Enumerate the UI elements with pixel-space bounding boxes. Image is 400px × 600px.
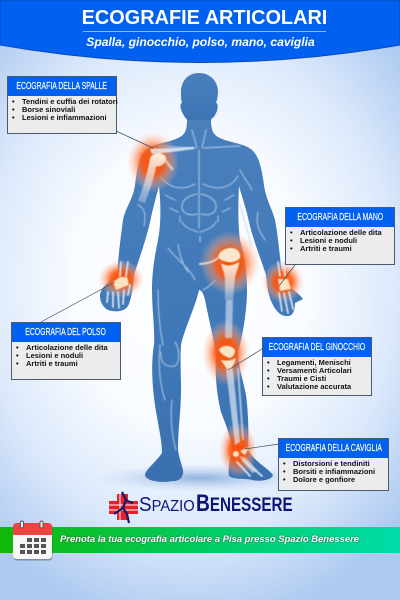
panel heading: ginocchio: ECOGRAFIA DEL GINOCCHIO <box>269 342 365 353</box>
panel: mano <box>285 207 395 265</box>
header banner <box>0 0 400 63</box>
panel heading: mano: ECOGRAFIA DELLA MANO <box>297 212 383 223</box>
panel: polso <box>11 322 121 380</box>
panel: caviglia <box>278 438 389 491</box>
logo wordmark: Spazio: SPAZIO <box>139 493 195 516</box>
list: ginocchio: Versamenti Articolari <box>277 366 352 375</box>
panel: ginocchio <box>262 337 372 396</box>
callout leader lines <box>41 131 295 449</box>
icon: calendar <box>13 520 52 560</box>
list: mano: Lesioni e noduli <box>300 236 357 245</box>
list: ginocchio <box>267 358 352 391</box>
panel: spalle <box>7 76 117 134</box>
panel heading: mano <box>286 208 394 227</box>
panel heading: polso <box>12 323 120 342</box>
ground shadow <box>95 464 305 492</box>
list: caviglia: Borsiti e infiammazioni <box>293 467 375 476</box>
list: ginocchio: Traumi e Cisti <box>277 374 326 383</box>
panel heading: caviglia: ECOGRAFIA DELLA CAVIGLIA <box>285 443 382 454</box>
panel heading: spalle: ECOGRAFIA DELLA SPALLE <box>17 81 107 92</box>
panel heading: spalle <box>8 77 116 96</box>
list: mano: Articolazione delle dita <box>300 228 382 237</box>
body silhouette <box>100 73 303 482</box>
list: polso <box>16 343 108 368</box>
subtitle: Spalla, ginocchio, polso, mano, caviglia <box>86 35 315 49</box>
call to action text: Prenota la tua ecografia articolare a Pisa presso Spazio Benessere <box>60 534 359 545</box>
list: polso: Artriti e traumi <box>26 359 78 368</box>
title: ECOGRAFIE ARTICOLARI <box>82 7 327 29</box>
icon: red cross with runner <box>109 492 138 524</box>
panel heading: caviglia <box>279 439 388 458</box>
list: ginocchio: Legamenti, Menischi <box>277 358 351 367</box>
list: ginocchio: Valutazione accurata <box>277 382 351 391</box>
muscle definition lines <box>138 130 265 450</box>
subtitle <box>83 31 326 51</box>
list: polso: Articolazione delle dita <box>26 343 108 352</box>
call to action green bar <box>0 527 400 553</box>
bones <box>113 147 291 473</box>
list: spalle <box>12 97 118 122</box>
list: caviglia: Distorsioni e tendiniti <box>293 459 370 468</box>
list: spalle: Lesioni e infiammazioni <box>22 113 107 122</box>
joint glows <box>98 132 304 478</box>
logo: Spazio Benessere <box>109 490 293 524</box>
list: spalle: Tendini e cuffia dei rotatori <box>22 97 118 106</box>
logo wordmark: Benessere: BENESSERE <box>196 490 293 517</box>
list: mano: Artriti e traumi <box>300 244 352 253</box>
list: polso: Lesioni e noduli <box>26 351 83 360</box>
panel heading: ginocchio <box>263 338 371 357</box>
list: caviglia <box>283 459 375 484</box>
panel heading: polso: ECOGRAFIA DEL POLSO <box>26 327 106 338</box>
list: caviglia: Dolore e gonfiore <box>293 475 355 484</box>
list: spalle: Borse sinoviali <box>22 105 75 114</box>
list: mano <box>290 228 382 253</box>
